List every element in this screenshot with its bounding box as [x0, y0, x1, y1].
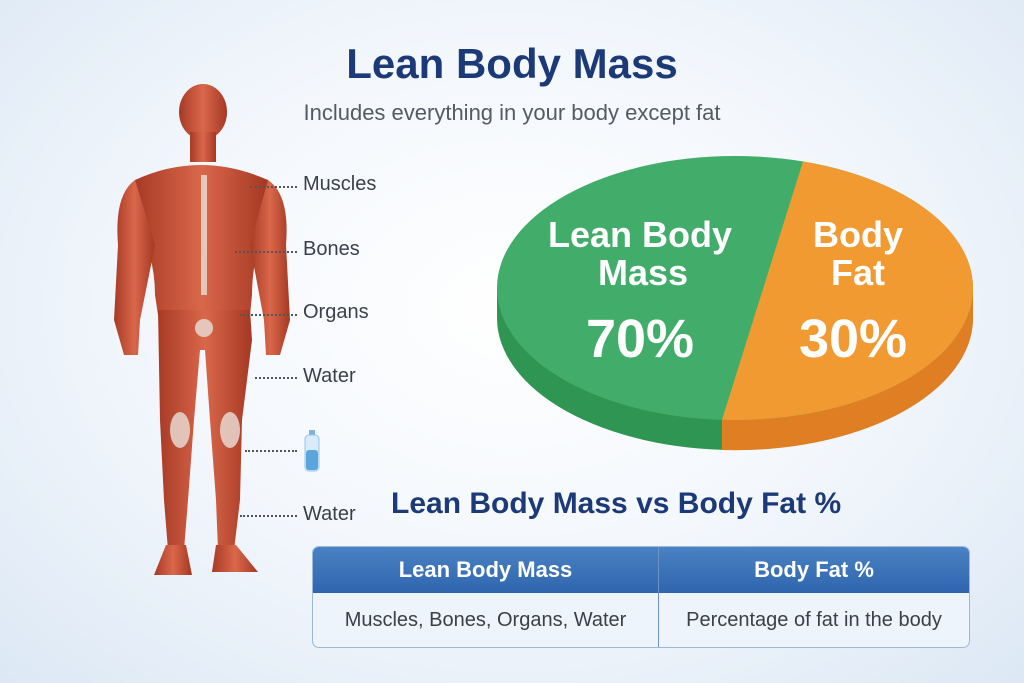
pie side	[497, 288, 973, 450]
label: Muscles: Muscles	[303, 173, 376, 195]
label: Bones: Bones	[303, 238, 360, 260]
label: Water 2: Water	[303, 503, 356, 525]
comparison table: Percentage of fat in the body	[686, 609, 942, 631]
label: Organs: Organs	[303, 301, 369, 323]
subtitle: Includes everything in your body except fat	[303, 100, 721, 125]
comparison table	[312, 546, 970, 648]
pie chart: Mass	[598, 252, 688, 293]
label: Water: Water	[303, 365, 356, 387]
slice: lean body mass	[497, 156, 973, 420]
comparison table: Muscles, Bones, Organs, Water	[345, 609, 626, 631]
comparison table: Lean Body Mass	[399, 557, 572, 582]
pie chart: Body	[813, 214, 903, 255]
pie chart: Lean Body	[548, 214, 732, 255]
pie chart	[497, 156, 973, 450]
icon: water bottle	[304, 430, 320, 472]
slice: body fat	[722, 162, 973, 420]
title: Lean Body Mass	[346, 40, 678, 87]
pie chart: 30%	[799, 309, 907, 369]
dotted leader lines	[235, 186, 297, 517]
pie chart: Fat	[831, 252, 885, 293]
table heading: Lean Body Mass vs Body Fat %	[391, 487, 841, 520]
body figure	[114, 84, 290, 575]
comparison table: Body Fat %	[754, 557, 874, 582]
pie chart: 70%	[586, 309, 694, 369]
